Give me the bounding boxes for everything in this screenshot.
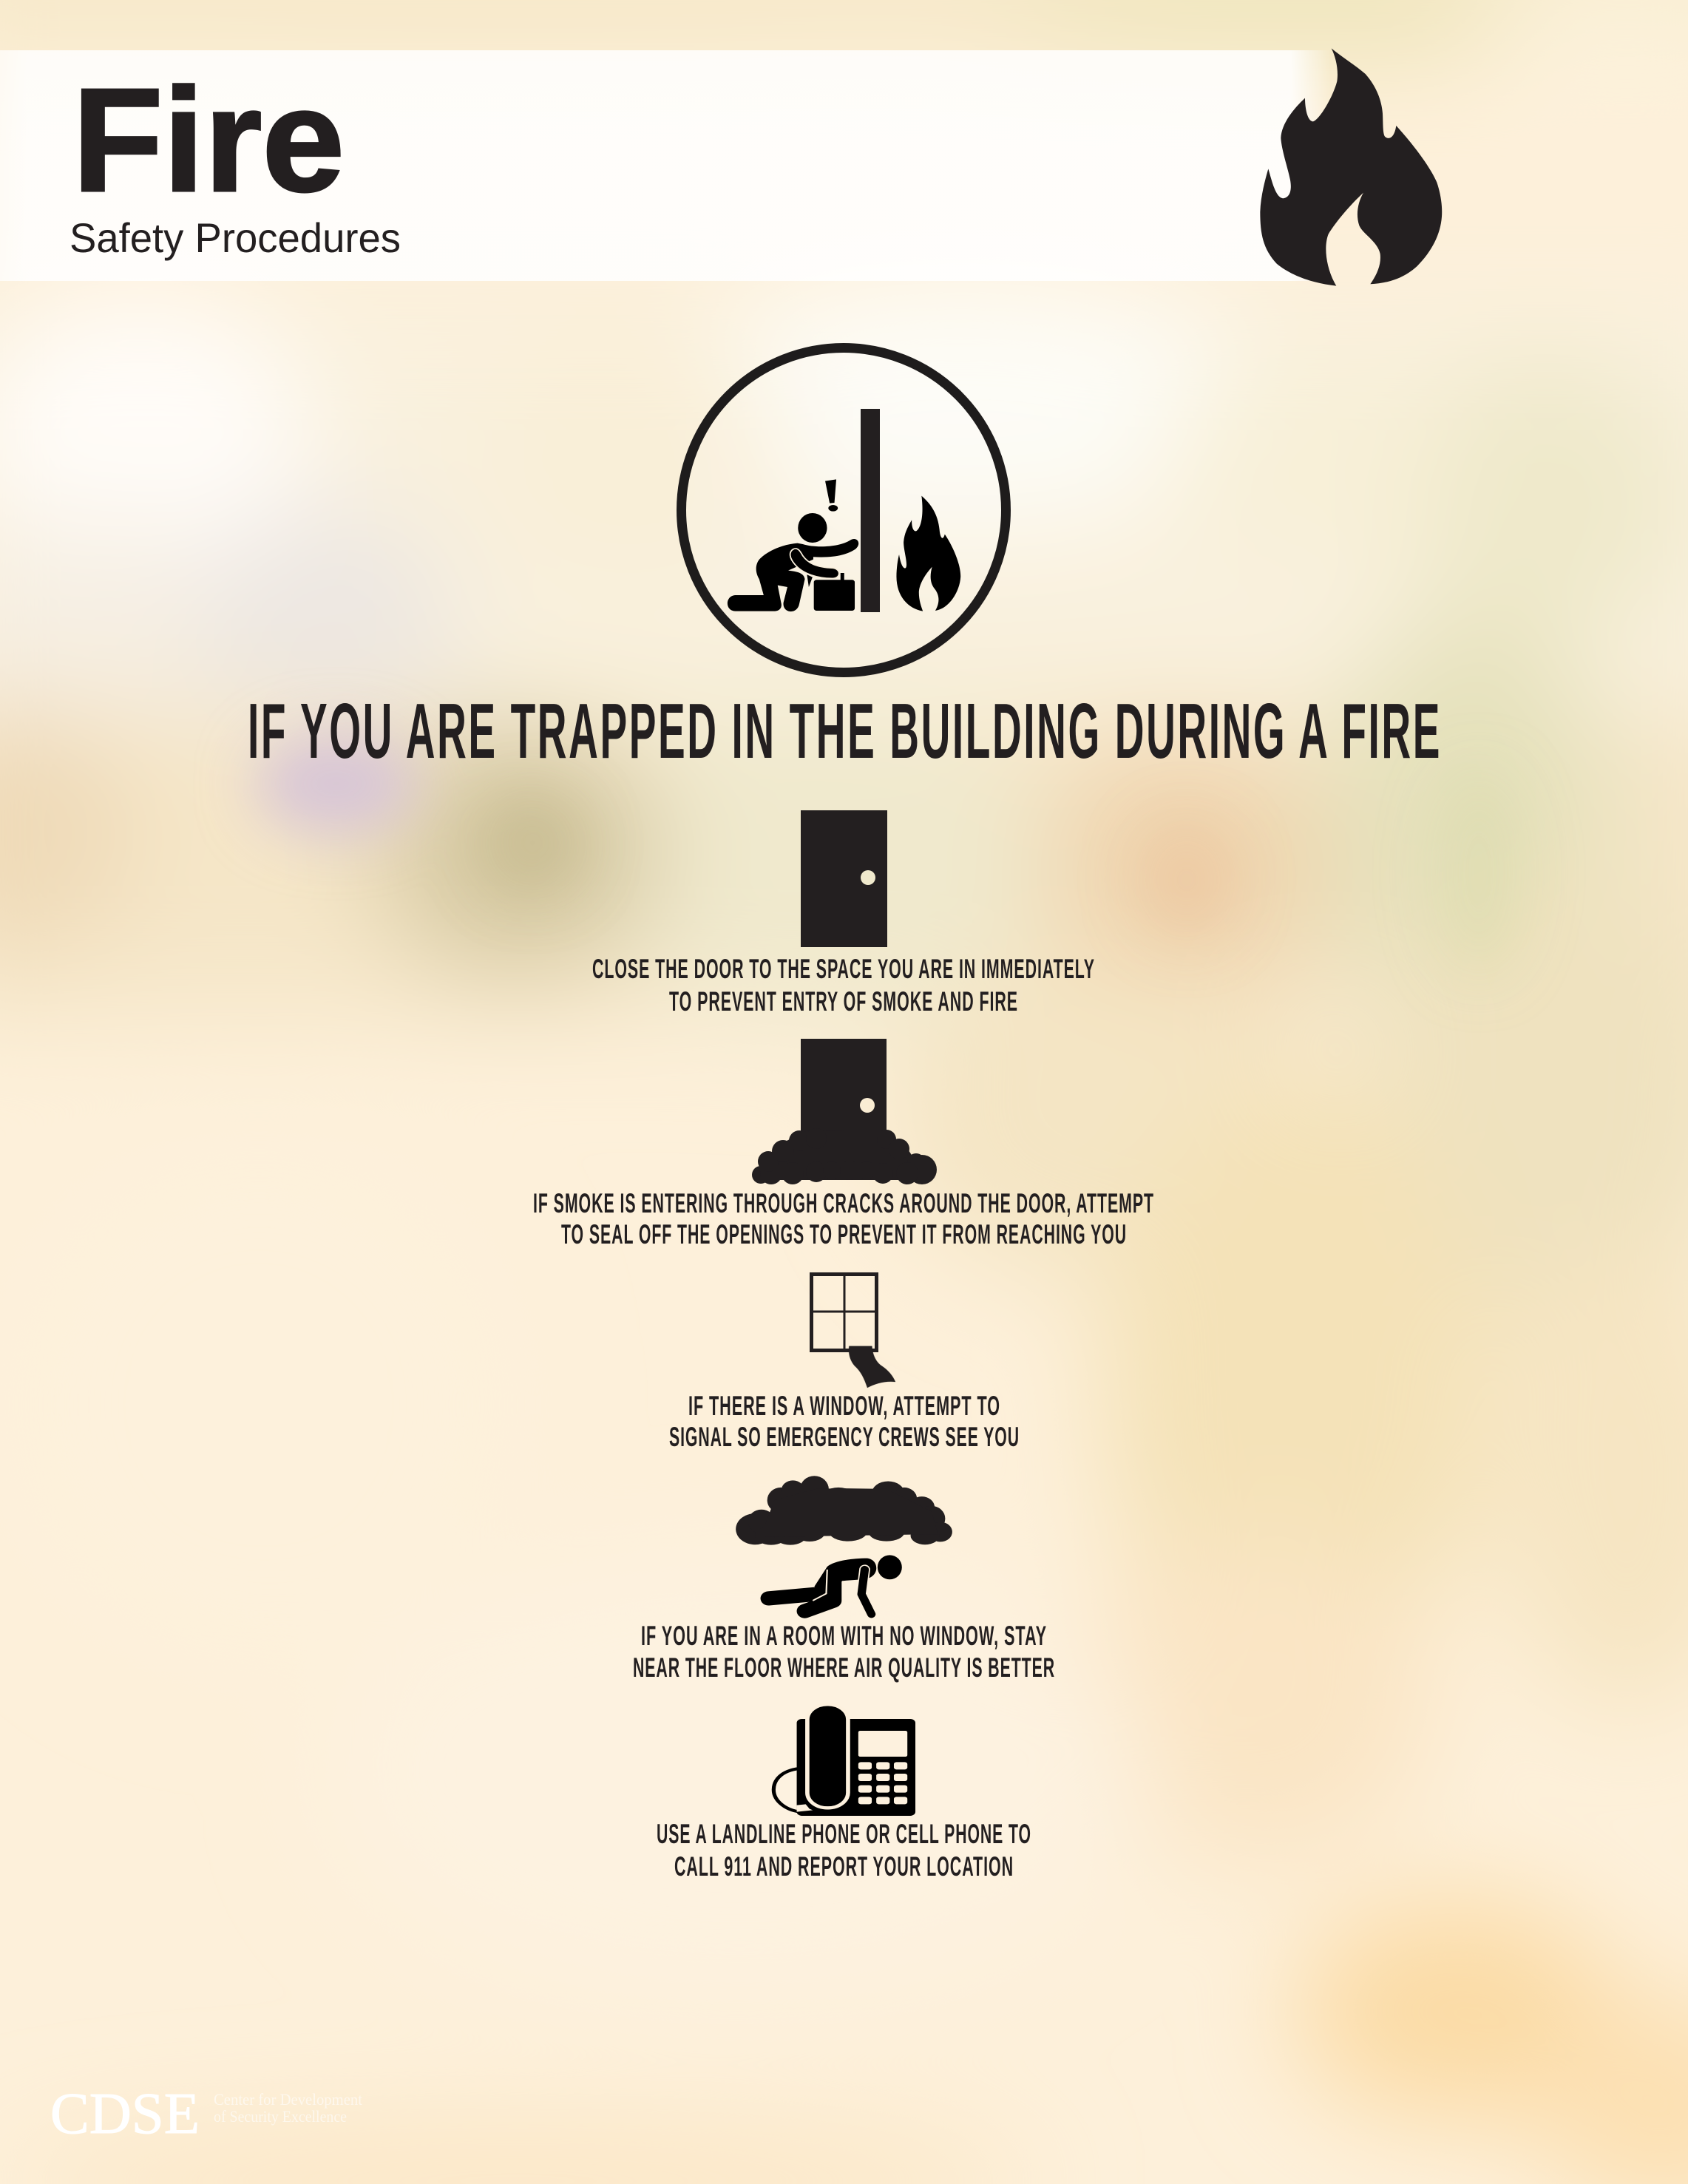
step 4 text: NEAR THE FLOOR WHERE AIR QUALITY IS BETTER (633, 1652, 1055, 1683)
icon: window with signal cloth (811, 1274, 895, 1388)
keypad (858, 1762, 907, 1804)
screen (858, 1731, 907, 1757)
step 4 text (633, 1621, 1055, 1683)
figures (728, 479, 960, 611)
logo: CDSE: Center for Development (214, 2090, 362, 2109)
icon: closed door (801, 810, 887, 947)
logo: CDSE: of Security Excellence (214, 2107, 347, 2126)
person kneeling (728, 513, 858, 611)
step 4 text: IF YOU ARE IN A ROOM WITH NO WINDOW, STAY (641, 1621, 1047, 1651)
small flame (896, 496, 960, 611)
cord (773, 1768, 803, 1812)
icon: person trapped behind wall with fire in circle (682, 347, 1006, 673)
wall (861, 409, 880, 612)
ring (682, 347, 1006, 673)
exclamation mark (825, 479, 838, 512)
icon: large flame (1260, 48, 1442, 286)
step 5 text (657, 1819, 1031, 1882)
icon: door with smoke (752, 1039, 937, 1184)
logo: CDSE (50, 2082, 362, 2146)
logo: CDSE: CDSE (50, 2082, 200, 2146)
step 1 text: CLOSE THE DOOR TO THE SPACE YOU ARE IN IMMEDIATELY (592, 954, 1095, 984)
icon: smoke cloud (736, 1476, 952, 1545)
step 2 text: TO SEAL OFF THE OPENINGS TO PREVENT IT FROM REACHING YOU (561, 1219, 1127, 1249)
icon: person crawling (768, 1555, 902, 1614)
handset (807, 1704, 848, 1808)
phone base (797, 1719, 915, 1816)
subtitle: Safety Procedures: Safety Procedures (70, 214, 401, 261)
title: Fire: Fire (72, 58, 345, 223)
step 3 text: IF THERE IS A WINDOW, ATTEMPT TO (688, 1391, 1000, 1421)
step 1 text (592, 954, 1095, 1017)
step 2 text (533, 1188, 1154, 1249)
step 3 text: SIGNAL SO EMERGENCY CREWS SEE YOU (669, 1422, 1020, 1452)
briefcase (814, 573, 855, 611)
step 3 text (669, 1391, 1020, 1452)
icon: landline phone (773, 1704, 915, 1816)
step 5 text: CALL 911 AND REPORT YOUR LOCATION (674, 1851, 1014, 1882)
step 1 text: TO PREVENT ENTRY OF SMOKE AND FIRE (669, 986, 1018, 1017)
step 5 text: USE A LANDLINE PHONE OR CELL PHONE TO (657, 1819, 1031, 1849)
step 2 text: IF SMOKE IS ENTERING THROUGH CRACKS AROUND THE DOOR, ATTEMPT (533, 1188, 1154, 1218)
header band (0, 50, 1331, 281)
